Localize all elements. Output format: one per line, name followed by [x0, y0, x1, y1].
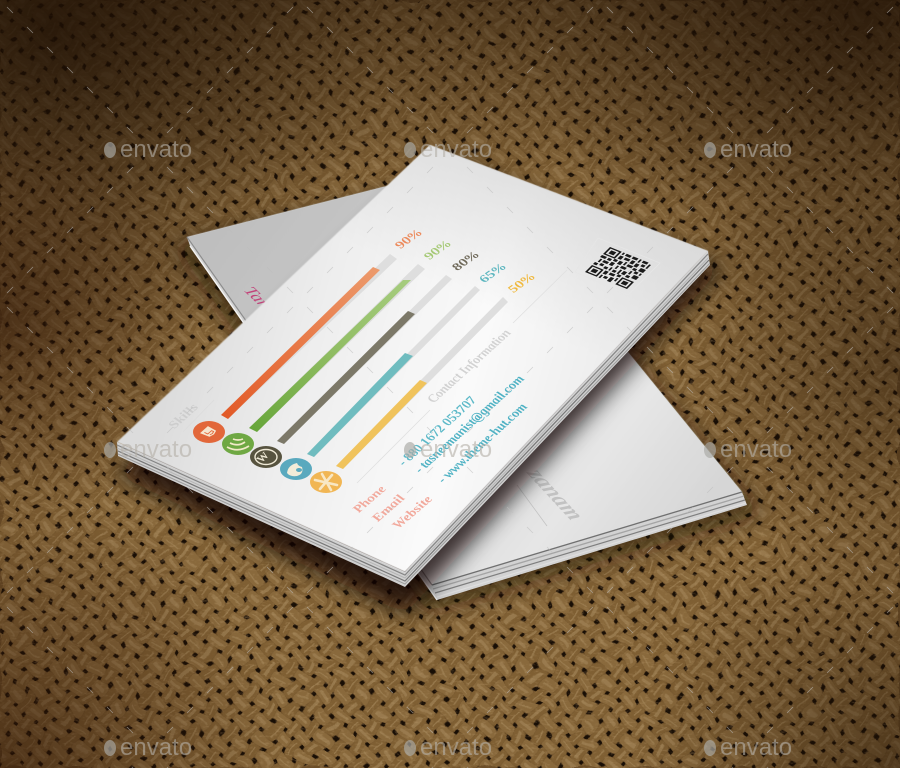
QR code frame — [575, 238, 660, 295]
watermark bottom row — [104, 734, 792, 761]
phone number: - 880 1672 053707 — [394, 394, 482, 468]
label 65%: 65% — [475, 262, 511, 285]
front card — [117, 145, 710, 587]
percentage labels — [391, 228, 540, 295]
watermark top row: envato — [120, 136, 192, 163]
label: phone: Phone — [349, 484, 390, 515]
watermark bottom row: envato — [720, 734, 792, 761]
watermark top row: envato — [420, 136, 492, 163]
label 90%: 90% — [391, 228, 427, 251]
skills heading: Skills — [165, 402, 203, 431]
watermark top row: envato — [720, 136, 792, 163]
label 90%: 90% — [420, 239, 456, 262]
watermark middle row: envato — [720, 436, 792, 463]
QR code — [585, 247, 652, 289]
front card edge stack — [117, 251, 710, 587]
watermark top row — [104, 136, 792, 163]
bar: HTML5 90% — [221, 254, 397, 419]
label: email: Email — [367, 493, 410, 524]
back card — [176, 168, 762, 612]
upper divider line — [513, 270, 567, 323]
bar: CSS3 90% — [249, 264, 425, 432]
front card face — [117, 145, 708, 572]
label 50%: 50% — [504, 272, 540, 295]
envato watermarks — [104, 136, 792, 761]
bar: Drupal 65% — [307, 286, 480, 457]
contact labels — [349, 484, 437, 531]
icon: CSS3 rings — [222, 433, 254, 455]
contact information heading: Contact Information — [424, 328, 515, 405]
icon: Drupal drop — [280, 458, 312, 480]
contact details — [394, 374, 532, 485]
icon: HTML5 — [193, 421, 225, 443]
skill icons — [193, 421, 342, 493]
icon: WordPress: W — [252, 450, 274, 464]
label 80%: 80% — [448, 250, 484, 273]
back card divider line — [517, 485, 547, 526]
website address: - www.theme-hut.com — [434, 402, 532, 485]
bar: Joomla 50% — [336, 297, 508, 469]
email address: - tasneemanist@gmail.com — [411, 374, 529, 475]
skills divider line — [183, 400, 214, 432]
back card name, grey fragment: zanam — [521, 465, 590, 523]
contact divider line — [357, 410, 430, 483]
back card edge stack — [187, 237, 746, 600]
bar chart: skill levels — [221, 254, 508, 469]
bar: WordPress 80% — [277, 275, 452, 444]
watermark middle row: envato — [420, 436, 492, 463]
back card name, pink fragment: Tan — [240, 284, 276, 311]
watermark middle row — [104, 436, 792, 463]
watermark bottom row: envato — [120, 734, 192, 761]
icon: Joomla star — [310, 471, 342, 493]
icon: WordPress — [250, 446, 282, 468]
watermark bottom row: envato — [420, 734, 492, 761]
label: website: Website — [388, 494, 437, 531]
shadow of front card — [116, 160, 722, 614]
watermark middle row: envato — [120, 436, 192, 463]
